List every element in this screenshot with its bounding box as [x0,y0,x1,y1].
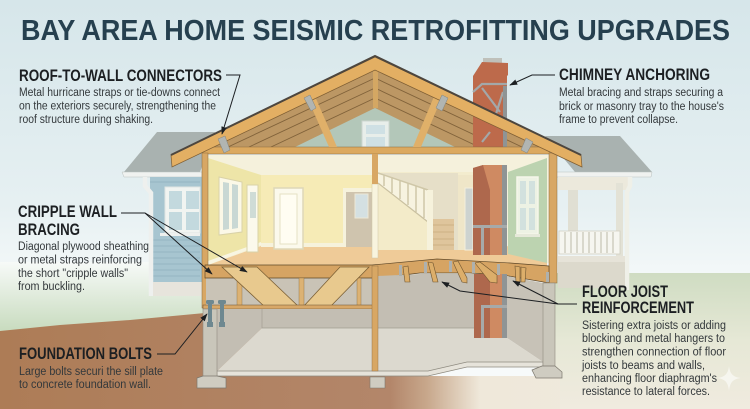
callout: cripple wall bracing: CRIPPLE WALL [18,203,117,221]
arrows: floor joist reinforcement [442,281,577,304]
callout: roof-to-wall connectors [19,67,222,126]
callout: roof-to-wall connectors: Metal hurricane straps or tie-downs connect [19,87,221,99]
callout: floor joist reinforcement: REINFORCEMENT [582,299,694,317]
callout: foundation bolts: FOUNDATION BOLTS [19,345,152,363]
staircase [378,173,473,250]
callout: foundation bolts [19,345,163,391]
callout: roof-to-wall connectors: on the exteriors securely, strengthening the [19,100,216,112]
chimney interior stack [473,165,507,255]
callout: chimney anchoring: Metal bracing and straps securing a [559,87,724,99]
callout: floor joist reinforcement: FLOOR JOIST [582,283,668,301]
metal roof connectors [218,95,533,153]
callout: floor joist reinforcement: enhancing floor diaphragm's [582,373,717,385]
callout: floor joist reinforcement: joists to beams and walls, [581,360,705,372]
arrow: chimney anchoring [510,75,555,85]
callout: floor joist reinforcement: strengthen connection of floor [582,346,726,358]
callout: floor joist reinforcement: blocking and metal hangers to [582,333,725,345]
icon: foundation bolts [206,300,226,327]
floor joist reinforcement pieces [399,261,549,283]
attic gable [200,60,552,148]
callout: chimney anchoring: CHIMNEY ANCHORING [559,66,710,84]
icon: sparkle [717,366,741,391]
callout: chimney anchoring: brick or masonry tray to the house's [559,101,724,113]
windows and doors [219,177,540,252]
callout: cripple wall bracing: Diagonal plywood sheathing [18,241,149,253]
interior room [205,155,553,268]
basement and foundation [197,266,562,388]
chimney [473,58,508,148]
callout: cripple wall bracing: BRACING [18,221,80,239]
callout: foundation bolts: Large bolts securi the sill plate [19,366,163,378]
arrow: foundation bolts [157,314,207,354]
callout: foundation bolts: to concrete foundation wall. [19,379,151,391]
callout: chimney anchoring [559,66,724,126]
callout: chimney anchoring: frame to prevent collapse. [559,114,678,126]
rafters and ceiling beam [171,56,582,308]
callout: roof-to-wall connectors: roof structure during shaking. [19,114,153,126]
callout: cripple wall bracing: or metal straps reinforcing [18,254,142,266]
background house left: blue siding [122,132,215,296]
arrow: roof-to-wall connectors [222,75,240,134]
callout: floor joist reinforcement [581,283,726,398]
callout: roof-to-wall connectors: ROOF-TO-WALL CONNECTORS [19,67,222,85]
callout: floor joist reinforcement: resistance to lateral forces. [582,386,710,398]
callout: floor joist reinforcement: Sistering extra joists or adding [582,320,726,332]
floor band and cripple wall [203,259,549,309]
background house right: porch [545,136,652,290]
callout: cripple wall bracing: the short "cripple walls" [18,268,128,280]
arrows: cripple wall bracing [121,213,247,274]
callout: cripple wall bracing [18,203,149,293]
house cross-section [171,56,582,388]
callout: cripple wall bracing: from buckling. [18,281,85,293]
